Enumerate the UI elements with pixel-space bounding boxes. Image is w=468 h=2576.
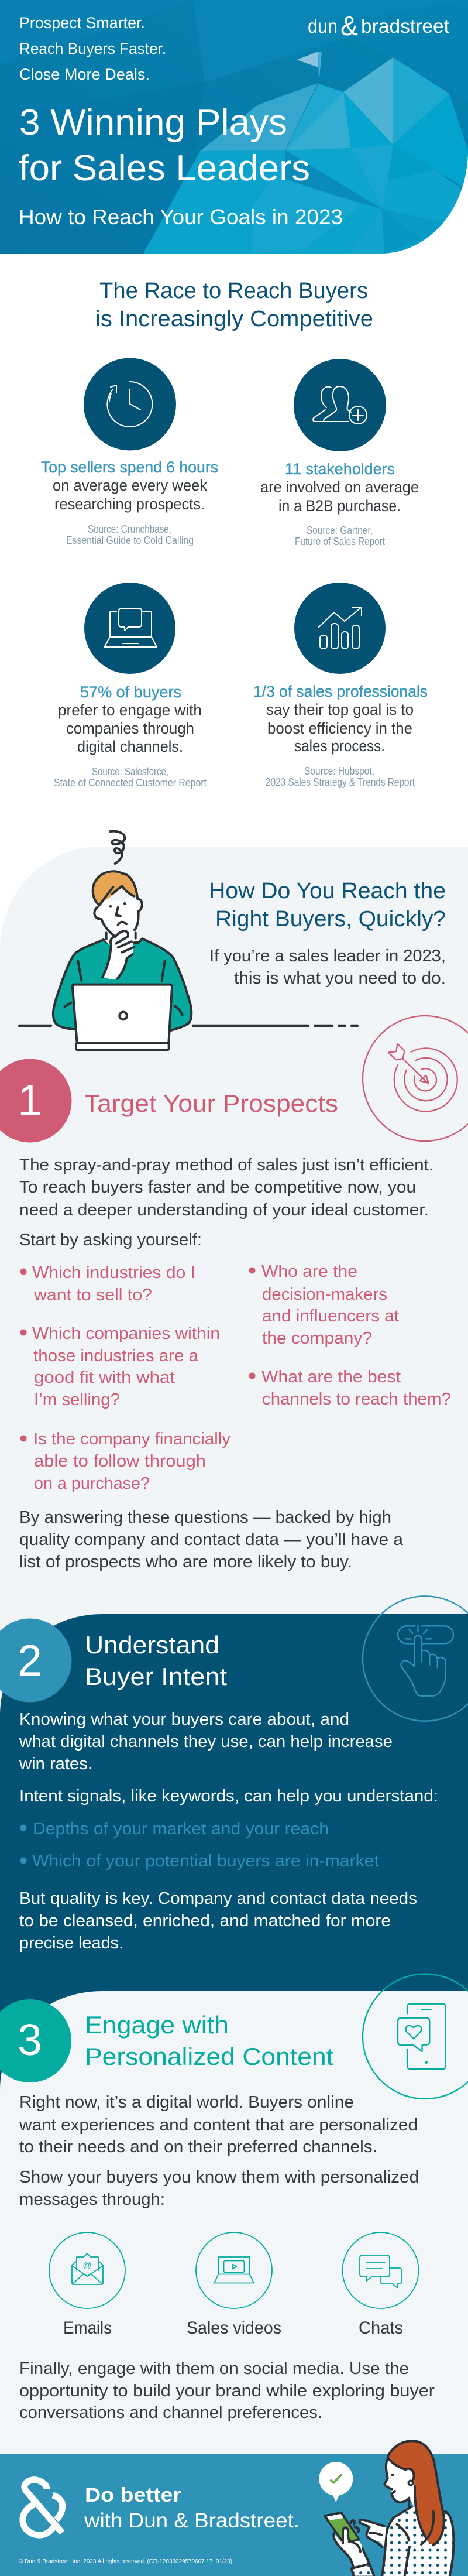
body text: knowing what your buyers care about: Intent signals, like keywords, can help you understand:	[19, 1787, 438, 1806]
icon: spiral	[110, 831, 125, 864]
bullet list: left column: want to sell to?	[33, 1286, 152, 1304]
body text: quality is key: precise leads.	[19, 1934, 123, 1952]
text: digital channels: 57% of buyers	[80, 683, 181, 701]
body text: spray and pray: To reach buyers faster and be competitive now, you	[19, 1178, 416, 1197]
bullet list: left column: those industries are a	[33, 1347, 198, 1365]
body text: social media: opportunity to build your brand while exploring buyer	[19, 2382, 435, 2400]
bullet list: left column	[20, 1263, 231, 1493]
text: top sellers	[41, 458, 218, 546]
body text: quality is key: to be cleansed, enriched, and matched for more	[19, 1912, 391, 1930]
bullet list: intent: Which of your potential buyers are in-market	[32, 1852, 379, 1871]
body text: knowing what your buyers care about: win rates.	[19, 1755, 92, 1773]
holding hand	[333, 2527, 369, 2567]
hair and face lines	[384, 2441, 444, 2545]
channel: chats: Chats	[359, 2318, 403, 2338]
blouse dots	[382, 2507, 454, 2576]
body text: digital world	[19, 2093, 419, 2209]
heading: understand buyer intent: Understand	[85, 1631, 219, 1659]
body text: quality is key	[19, 1889, 417, 1952]
heading: engage with personalized content: Engage with	[85, 2011, 229, 2039]
copyright: © Dun & Bradstreet, Inc. 2023 All rights reserved. (CR-12036029570607 17 01/23)	[19, 2558, 232, 2565]
stat: stakeholders	[260, 359, 419, 547]
text: stakeholders	[260, 460, 419, 547]
tagline	[19, 14, 166, 83]
tagline: Prospect Smarter.	[19, 14, 145, 32]
bullet list: left column: Which industries do I	[32, 1263, 195, 1282]
bullet list: left column: on a purchase?	[34, 1474, 150, 1493]
illustration: woman with phone	[319, 2441, 454, 2576]
icon: people	[294, 359, 386, 451]
icon: clock	[84, 358, 176, 451]
logo: dun and bradstreet	[308, 11, 449, 41]
bullet list: right column: the company?	[262, 1329, 372, 1348]
phone	[325, 2513, 359, 2543]
bullet list: intent	[20, 1820, 379, 1871]
text: top sellers: on average every week	[53, 477, 207, 494]
panel: light background	[0, 847, 468, 2459]
body text: spray and pray: need a deeper understanding of your ideal customer.	[19, 1201, 429, 1220]
channel: emails	[49, 2232, 125, 2338]
text: sales professionals: sales process.	[294, 737, 385, 755]
channel: emails: Emails	[63, 2318, 112, 2338]
body text: spray and pray: Start by asking yourself:	[19, 1231, 202, 1249]
face	[384, 2458, 414, 2508]
bullet list: right column: channels to reach them?	[262, 1390, 451, 1409]
stat: digital channels	[54, 583, 207, 789]
subtitle: How to Reach Your Goals in 2023	[19, 205, 343, 229]
illustration: thinking man at laptop	[53, 831, 191, 1050]
footer	[0, 2441, 468, 2576]
number badge 3	[0, 1999, 71, 2082]
title: 3 Winning Plays	[19, 102, 287, 143]
text: digital channels: companies through	[66, 720, 194, 737]
text: stakeholders: Future of Sales Report	[295, 535, 385, 547]
text: sales professionals: Source: Hubspot,	[304, 765, 374, 777]
heading: engage with personalized content	[85, 2011, 333, 2070]
polygon mountain background	[0, 0, 468, 254]
text: sales professionals: boost efficiency in the	[267, 720, 412, 737]
heading: the race to reach buyers: The Race to Reach Buyers	[99, 279, 368, 303]
header banner	[0, 0, 468, 254]
body text: digital world: to their needs and on their preferred channels.	[19, 2137, 377, 2156]
hair	[388, 2441, 444, 2545]
body text: digital world: Show your buyers you know them with personalized	[19, 2168, 419, 2187]
number badge 2	[0, 1618, 71, 1703]
sweater	[53, 938, 191, 1030]
title	[19, 102, 310, 189]
body text: social media: Finally, engage with them on social media. Use the	[19, 2359, 409, 2378]
intro text	[209, 947, 446, 988]
text: digital channels: Source: Salesforce,	[92, 765, 168, 777]
heading: understand buyer intent: Buyer Intent	[85, 1663, 227, 1690]
head	[95, 898, 138, 932]
heading: target your prospects: Target Your Prospects	[84, 1090, 338, 1117]
blouse	[382, 2507, 454, 2576]
bullet list: left column: I’m selling?	[34, 1390, 120, 1409]
logo mark: ampersand	[23, 2480, 63, 2535]
heading: how do you reach the right buyers: How Do You Reach the	[209, 879, 446, 903]
text: digital channels	[54, 683, 207, 789]
laptop	[73, 985, 172, 1043]
number badge 1	[0, 1059, 71, 1143]
logo: dun and bradstreet: &	[340, 11, 358, 41]
call to action	[84, 2484, 300, 2532]
body text: knowing what your buyers care about	[19, 1710, 438, 1806]
body text: spray and pray: The spray-and-pray method of sales just isn’t efficient.	[19, 1156, 433, 1174]
icon: target and arrow	[363, 1016, 468, 1141]
body text: knowing what your buyers care about: what digital channels they use, can help increase	[19, 1732, 393, 1751]
bullet list: right column: and influencers at	[262, 1307, 399, 1325]
hand	[104, 931, 133, 979]
channel: sales videos: Sales videos	[187, 2318, 281, 2338]
heading: the race to reach buyers: is Increasingly Competitive	[95, 307, 373, 331]
icon: laptop chat	[84, 583, 176, 674]
text: sales professionals: 2023 Sales Strategy & Trends Report	[266, 776, 415, 788]
neck	[105, 932, 136, 944]
heading: engage with personalized content: Personalized Content	[85, 2043, 333, 2070]
number badge 2: 2	[18, 1636, 42, 1685]
section 3: engage with personalized content	[0, 1974, 468, 2459]
table line	[19, 1025, 357, 1027]
icon: flag	[297, 52, 322, 84]
text: stakeholders: are involved on average	[260, 478, 419, 496]
text: top sellers: Essential Guide to Cold Calling	[66, 534, 194, 546]
icon: phone with heart bubble	[363, 1974, 468, 2099]
bullet list: left column: Which companies within	[32, 1324, 220, 1343]
text: top sellers: researching prospects.	[54, 495, 205, 513]
text: stakeholders: Source: Gartner,	[307, 524, 373, 536]
body text: by answering: By answering these questions — backed by high	[19, 1508, 391, 1527]
number badge 1: 1	[18, 1075, 42, 1125]
face lines	[65, 871, 183, 1015]
sleeve cuff	[352, 2564, 374, 2576]
bullet list: right column	[249, 1262, 451, 1409]
bullet list: left column: good fit with what	[34, 1368, 175, 1387]
logo: dun and bradstreet: bradstreet	[361, 15, 449, 37]
body text: digital world: Right now, it’s a digital world. Buyers online	[19, 2093, 354, 2112]
bullet list: intent: Depths of your market and your reach	[33, 1820, 329, 1838]
section 1: target your prospects	[0, 1016, 468, 1571]
bullet list: left column: able to follow through	[34, 1452, 206, 1471]
tagline: Reach Buyers Faster.	[19, 40, 166, 57]
speech bubble with check	[319, 2462, 353, 2502]
text: sales professionals	[253, 683, 428, 788]
text: top sellers: Top sellers spend 6 hours	[41, 458, 218, 476]
channel: emails: @	[82, 2260, 92, 2270]
title: for Sales Leaders	[19, 148, 310, 189]
text: top sellers: Source: Crunchbase,	[88, 523, 171, 535]
text: sales professionals: 1/3 of sales professionals	[253, 683, 428, 700]
stat: sales professionals	[253, 583, 428, 788]
stat: top sellers	[41, 358, 218, 546]
icon: hand pressing button	[363, 1596, 468, 1721]
call to action: Do better	[85, 2484, 181, 2506]
call to action: with Dun & Bradstreet.	[84, 2509, 300, 2532]
text: sales professionals: say their top goal is to	[266, 701, 414, 718]
body text: spray and pray	[19, 1156, 433, 1249]
body text: by answering: list of prospects who are more likely to buy.	[19, 1553, 352, 1571]
text: stakeholders: 11 stakeholders	[285, 460, 395, 478]
number badge 3: 3	[18, 2015, 42, 2064]
channel: sales videos	[187, 2232, 281, 2338]
tagline: Close More Deals.	[19, 66, 150, 83]
panel: dark background	[0, 1614, 468, 2108]
text: stakeholders: in a B2B purchase.	[278, 497, 401, 515]
hair	[93, 871, 137, 906]
heading: how do you reach the right buyers	[209, 879, 446, 931]
text: digital channels: State of Connected Customer Report	[54, 776, 207, 789]
body text: social media	[19, 2359, 435, 2422]
blouse lines	[382, 2507, 453, 2576]
bullet list: right column: What are the best	[261, 1368, 401, 1386]
channel: chats	[343, 2232, 419, 2338]
body text: digital world: messages through:	[19, 2190, 165, 2209]
section 2: understand buyer intent	[0, 1596, 468, 2108]
body text: social media: conversations and channel preferences.	[19, 2403, 322, 2422]
intro text: If you’re a sales leader in 2023,	[209, 947, 446, 965]
heading: the race to reach buyers	[95, 279, 373, 331]
heading: how do you reach the right buyers: Right Buyers, Quickly?	[215, 907, 446, 931]
body text: digital world: want experiences and content that are personalized	[19, 2116, 418, 2135]
text: digital channels: prefer to engage with	[58, 701, 202, 719]
bullet list: right column: Who are the	[261, 1262, 357, 1281]
heading: understand buyer intent	[85, 1631, 227, 1690]
text: digital channels: digital channels.	[77, 738, 183, 755]
body text: quality is key: But quality is key. Company and contact data needs	[19, 1889, 417, 1908]
intro text: this is what you need to do.	[234, 969, 446, 988]
bullet list: right column: decision-makers	[262, 1285, 387, 1304]
panel: light background	[0, 1991, 468, 2459]
logo: dun and bradstreet: dun	[308, 15, 338, 37]
bullet list: left column: Is the company financially	[33, 1430, 231, 1448]
pointing hand	[360, 2520, 386, 2547]
icon: growth chart	[294, 583, 386, 674]
body text: by answering	[19, 1508, 403, 1571]
panel: footer background	[0, 2454, 468, 2576]
body text: by answering: quality company and contact data — you’ll have a	[19, 1530, 403, 1549]
body text: knowing what your buyers care about: Knowing what your buyers care about, and	[19, 1710, 349, 1729]
